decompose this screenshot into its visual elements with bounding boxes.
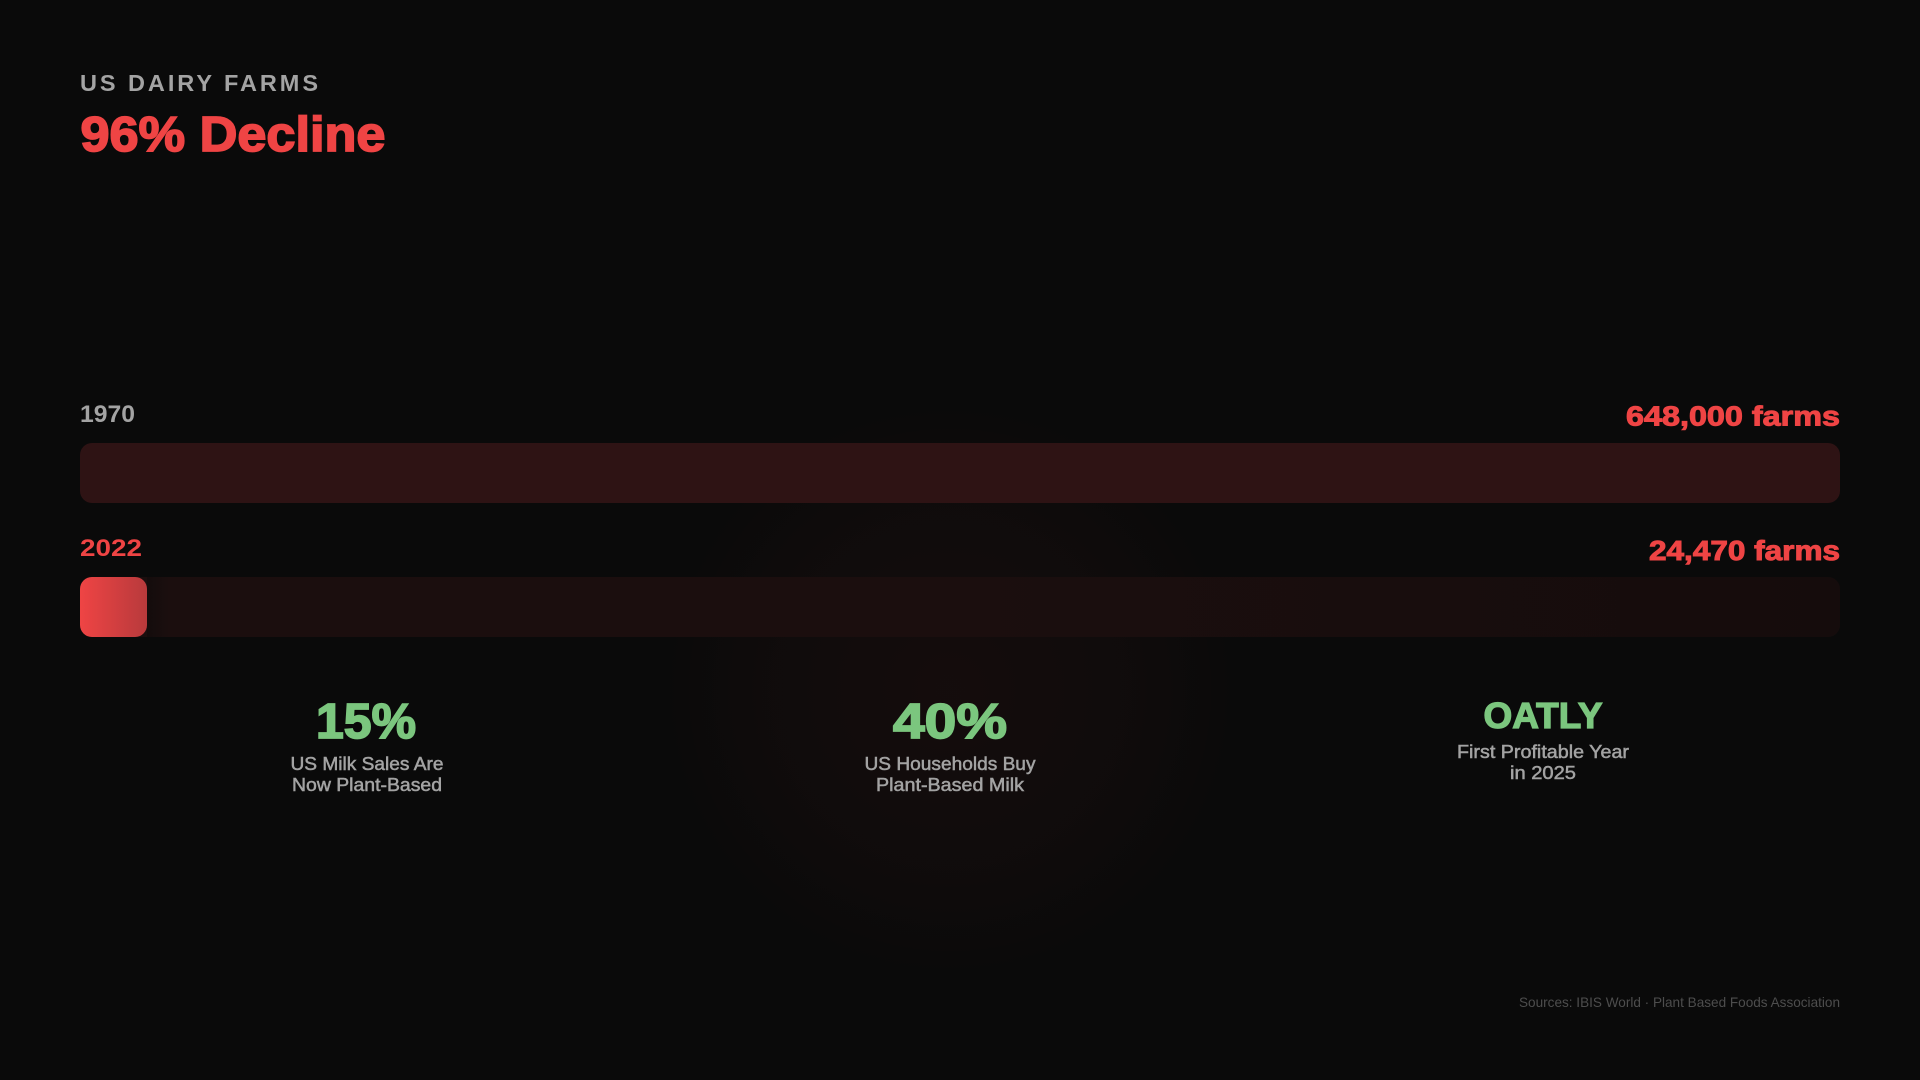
- number 40%: 40%: [893, 695, 1007, 749]
- stat: 15%: [290, 695, 444, 795]
- caption 15%: US Milk Sales Are: [290, 754, 444, 774]
- caption 15%: Now Plant-Based: [292, 775, 442, 795]
- number Oatly: OATLY: [1484, 695, 1602, 736]
- eyebrow: US dairy farms: US DAIRY FARMS: [80, 70, 318, 96]
- caption 40%: Plant-Based Milk: [876, 775, 1025, 795]
- value 648,000 farms: 648,000 farms: [1626, 400, 1840, 432]
- chart: farm counts 1970 vs 2022: [80, 400, 1840, 637]
- caption Oatly: [1457, 742, 1629, 783]
- bar 1970: [80, 443, 1840, 503]
- row: 2022: [80, 535, 1840, 637]
- source note: Sources: IBIS World · Plant Based Foods Association: [1519, 994, 1840, 1010]
- stat: 40%: [864, 695, 1036, 795]
- row: 1970: [80, 400, 1840, 503]
- stat: Oatly: [1457, 695, 1629, 783]
- stats row: [290, 695, 1629, 795]
- header: [80, 70, 386, 162]
- year label 2022: 2022: [80, 535, 142, 562]
- caption Oatly: in 2025: [1510, 763, 1576, 783]
- title: 96% decline: 96% Decline: [80, 108, 386, 162]
- caption 40%: [864, 754, 1036, 795]
- number 15%: 15%: [316, 695, 416, 749]
- caption 40%: US Households Buy: [864, 754, 1036, 774]
- value 24,470 farms: 24,470 farms: [1649, 535, 1840, 566]
- bar track 2022: [80, 577, 1840, 637]
- shadow beside fill: [147, 577, 169, 637]
- caption Oatly: First Profitable Year: [1457, 742, 1629, 762]
- bar fill 2022: [80, 577, 147, 637]
- year label 1970: 1970: [80, 401, 135, 428]
- caption 15%: [290, 754, 444, 795]
